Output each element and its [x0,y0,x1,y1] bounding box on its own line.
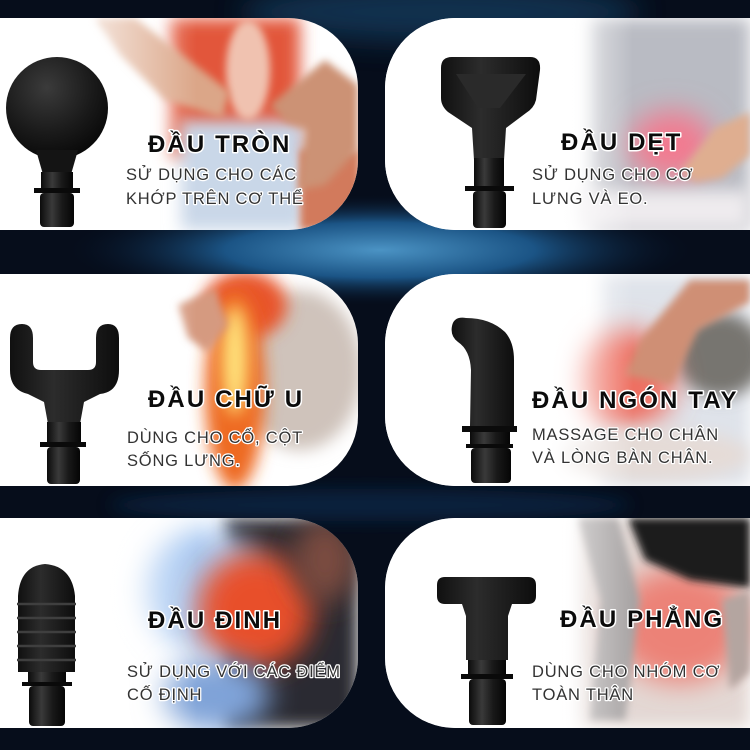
icon: round massage head [6,57,108,227]
panel: đầu phẳng [385,518,750,728]
icon: flat wedge head [441,57,540,228]
description: MASSAGE CHO CHÂN [532,425,719,444]
photo: glowing knee [143,518,358,731]
description: LƯNG VÀ EO. [532,189,648,208]
panel: đầu dẹt [385,18,750,230]
icon: finger head [452,318,517,483]
panel: đầu chữ U [0,271,362,490]
heading: ĐẦU DẸT [561,128,682,156]
heading: ĐẦU NGÓN TAY [532,386,739,414]
panel: đầu đinh [0,518,358,731]
icon: U-shaped head [10,324,119,484]
description: SỬ DỤNG VỚI CÁC ĐIỂM [127,662,341,681]
photo: foot and calf massage [550,274,750,486]
description: SỬ DỤNG CHO CÁC [126,165,297,184]
description: KHỚP TRÊN CƠ THỂ [126,189,304,208]
photo: knee with red muscles [95,18,360,230]
description: TOÀN THÂN [532,685,634,704]
panel: đầu tròn [0,18,360,230]
description: DÙNG CHO CỔ, CỘT [127,428,303,447]
heading: ĐẦU TRÒN [148,130,291,158]
panel: đầu ngón tay [385,274,750,486]
description: SỬ DỤNG CHO CƠ [532,165,693,184]
heading: ĐẦU PHẲNG [560,605,724,633]
photo: lower back pain [575,18,750,230]
photo: neck and spine [178,271,362,490]
heading: ĐẦU ĐINH [148,606,282,634]
icon: bullet head [17,564,76,726]
description: VÀ LÒNG BÀN CHÂN. [532,448,713,467]
heading: ĐẦU CHỮ U [148,385,304,413]
description: SỐNG LƯNG. [127,450,241,470]
description: CỐ ĐỊNH [127,684,202,704]
photo: thigh [578,518,750,728]
icon: flat mushroom head [437,577,536,725]
description: DÙNG CHO NHÓM CƠ [532,662,720,681]
